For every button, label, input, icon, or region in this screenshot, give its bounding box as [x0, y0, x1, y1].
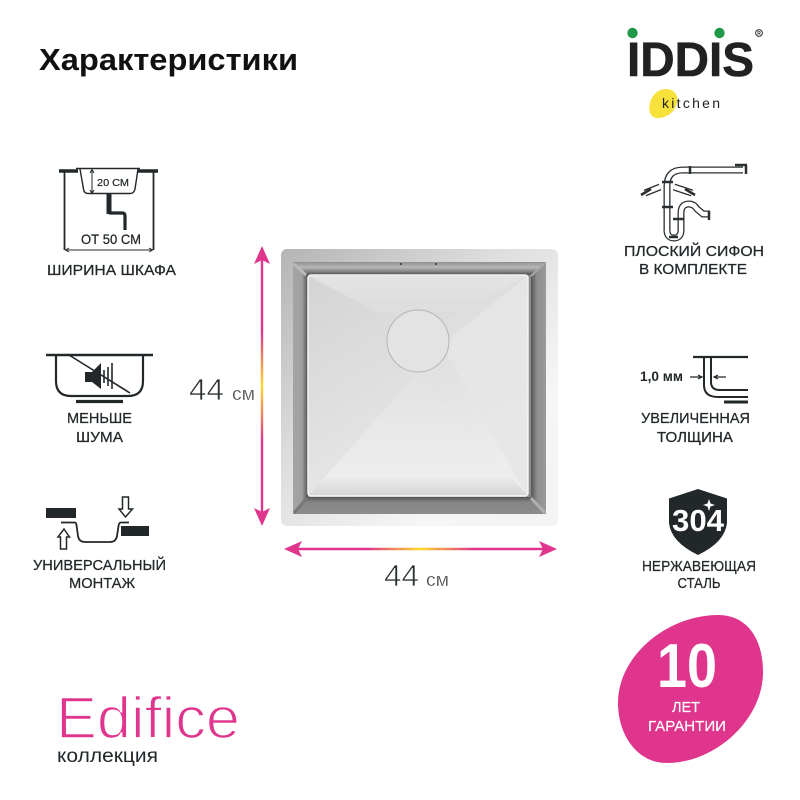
label: cabinet width: ШИРИНА ШКАФА [47, 262, 176, 279]
text: height 44 cm [189, 372, 255, 407]
collection name: Edifice [56, 686, 240, 751]
label: less noise: ШУМА [76, 429, 123, 446]
label: siphon: В КОМПЛЕКТЕ [639, 261, 747, 278]
badge: 10 years warranty [618, 615, 763, 763]
icon: thickness [690, 357, 748, 402]
text: width 44 cm [384, 558, 449, 593]
icon: universal mounting [46, 497, 149, 549]
text: from 50 cm: ОТ 50 СМ [81, 231, 141, 247]
icon: cabinet width [59, 168, 158, 252]
label: thickness [641, 410, 750, 446]
label: universal mounting: МОНТАЖ [69, 575, 135, 592]
label: stainless steel: НЕРЖАВЕЮЩАЯ [642, 558, 756, 575]
logo: IDDIS kitchen [627, 28, 762, 118]
label: universal mounting [33, 556, 166, 592]
text: 1.0 mm: 1,0 мм [640, 369, 683, 384]
icon: 304 shield [669, 489, 727, 555]
badge: 10 years warranty: ЛЕТ [672, 699, 700, 716]
label: siphon [624, 242, 764, 278]
logo: IDDIS kitchen: IDDIS [627, 34, 754, 87]
arrow: height dimension [254, 246, 270, 526]
icon: 304 shield: 304 [672, 503, 725, 538]
label: siphon: ПЛОСКИЙ СИФОН [624, 242, 764, 260]
text: width 44 cm: см [426, 570, 449, 590]
badge: 10 years warranty: 10 [657, 632, 717, 701]
label: less noise [67, 410, 132, 446]
logo: IDDIS kitchen: R [757, 31, 761, 37]
arrow: width dimension [284, 541, 557, 557]
text: width 44 cm: 44 [384, 558, 419, 593]
logo: IDDIS kitchen: kitchen [662, 95, 720, 111]
icon: siphon [641, 165, 747, 238]
label: thickness: ТОЛЩИНА [657, 429, 733, 446]
badge: 10 years warranty: ГАРАНТИИ [648, 718, 726, 735]
title: Характеристики [39, 42, 298, 77]
label: universal mounting: УНИВЕРСАЛЬНЫЙ [33, 556, 166, 574]
text: height 44 cm: см [232, 384, 255, 404]
sink image [281, 249, 558, 526]
label: stainless steel: СТАЛЬ [678, 575, 721, 592]
label: thickness: УВЕЛИЧЕННАЯ [641, 410, 750, 427]
text: 20 cm: 20 СМ [97, 177, 129, 189]
icon: less noise [46, 355, 153, 402]
text: height 44 cm: 44 [189, 372, 224, 407]
collection caption: коллекция [57, 746, 158, 767]
label: less noise: МЕНЬШЕ [67, 410, 132, 427]
label: stainless steel [642, 558, 756, 592]
